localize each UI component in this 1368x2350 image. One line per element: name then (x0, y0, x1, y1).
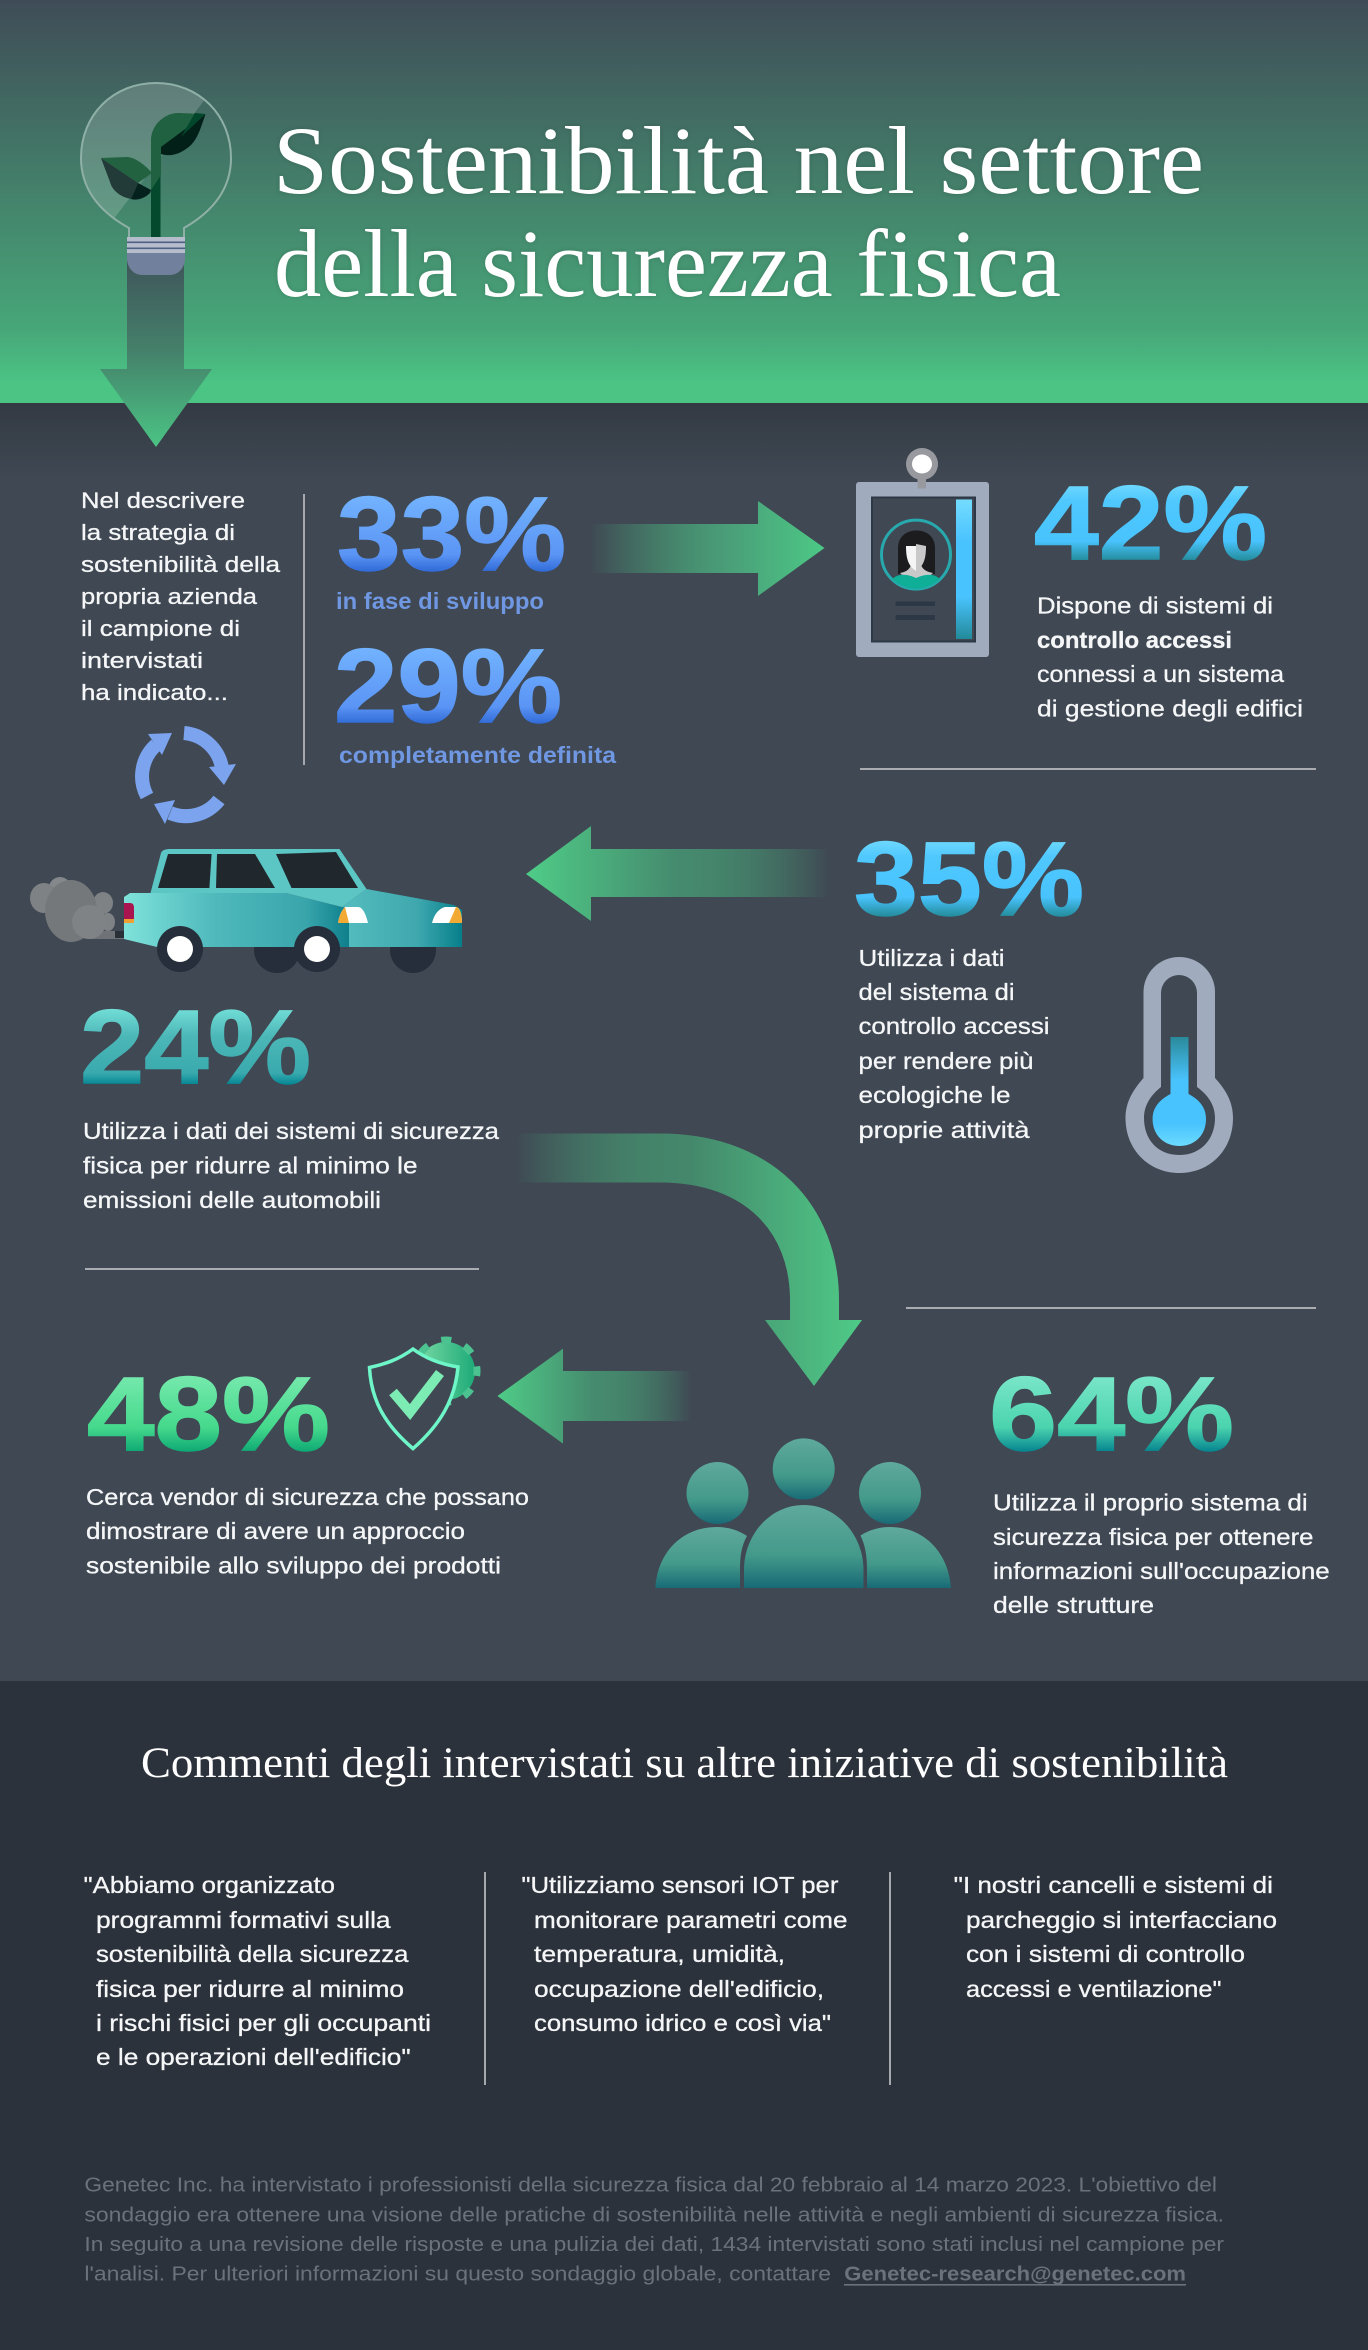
quote 1: i rischi fisici per gli occupanti (96, 2010, 431, 2036)
stat: 29% completamente definita: completamente definita (339, 742, 616, 768)
icon: light bulb with plant (80, 82, 232, 275)
methodology note: In seguito a una revisione delle risposte e una pulizia dei dati, 1434 intervistati sono stati inclusi nel campione per (84, 2234, 1224, 2256)
icon: car with exhaust smoke (30, 849, 462, 973)
quote 2 (521, 1872, 848, 2036)
stat: 42% access control (1034, 465, 1303, 722)
text block: strategy intro: la strategia di (81, 520, 235, 545)
stat: 48% vendors: 48% (87, 1356, 330, 1473)
methodology note: Genetec Inc. ha intervistato i professionisti della sicurezza fisica dal 20 febbraio al 14 marzo 2023. L'obiettivo del (84, 2175, 1217, 2197)
stat: 35% greener operations: del sistema di (858, 979, 1014, 1005)
quote 3: "I nostri cancelli e sistemi di (954, 1872, 1273, 1898)
text block: strategy intro: Nel descrivere (81, 488, 245, 513)
quote 1: fisica per ridurre al minimo (96, 1976, 404, 2002)
stat: 64% occupancy (989, 1356, 1330, 1618)
heading: comments: Commenti degli intervistati su altre iniziative di sostenibilità (141, 1740, 1228, 1787)
stat: 24% car emissions: 24% (80, 989, 311, 1106)
quote 3: accessi e ventilazione" (966, 1976, 1222, 2002)
text block: strategy intro: propria azienda (81, 584, 258, 609)
icon: ID badge (856, 448, 989, 657)
arrow: 33% to access card (590, 501, 824, 596)
text block: strategy intro: sostenibilità della (81, 552, 281, 577)
quote 1 (84, 1872, 431, 2070)
page background (0, 403, 1368, 1683)
stat: 24% car emissions: Utilizza i dati dei sistemi di sicurezza (83, 1118, 500, 1144)
methodology note (84, 2175, 1224, 2286)
stat: 24% car emissions: fisica per ridurre al minimo le (83, 1153, 418, 1179)
stat: 64% occupancy: 64% (989, 1356, 1234, 1473)
quote 3: parcheggio si interfacciano (966, 1907, 1277, 1933)
title (273, 107, 1204, 317)
stat: 33% in fase di sviluppo: in fase di sviluppo (336, 588, 544, 614)
arrow: curved down to people (515, 1158, 862, 1386)
stat: 24% car emissions (80, 989, 500, 1213)
text block: strategy intro (81, 488, 281, 705)
text block: strategy intro: intervistati (81, 648, 203, 673)
stat: 64% occupancy: delle strutture (993, 1592, 1154, 1618)
stat: 42% access control: controllo accessi (1037, 627, 1232, 653)
title: della sicurezza fisica (274, 210, 1061, 317)
arrow: 35% to car (526, 826, 830, 921)
stat: 35% greener operations: Utilizza i dati (858, 945, 1004, 971)
arrow: from bulb downward (100, 253, 212, 447)
arrow: to 48% (497, 1349, 692, 1444)
quote 1: programmi formativi sulla (96, 1907, 392, 1933)
stat: 42% access control: di gestione degli edifici (1037, 696, 1303, 722)
methodology note: sondaggio era ottenere una visione delle pratiche di sostenibilità nelle attività e negli ambienti di sicurezza fisica. (84, 2205, 1224, 2227)
stat: 29% completamente definita (334, 628, 616, 768)
quote 2: temperatura, umidità, (534, 1941, 785, 1967)
icon: people (656, 1438, 951, 1588)
stat: 35% greener operations: per rendere più (858, 1048, 1034, 1074)
stat: 33% in fase di sviluppo: 33% (337, 476, 566, 593)
quote 3 (954, 1872, 1277, 2002)
stat: 64% occupancy: Utilizza il proprio sistema di (993, 1490, 1308, 1516)
icon: thermometer (1126, 957, 1233, 1173)
title: Sostenibilità nel settore (273, 107, 1204, 214)
quote 2: occupazione dell'edificio, (534, 1976, 824, 2002)
quote 1: e le operazioni dell'edificio" (96, 2044, 411, 2070)
stat: 42% access control: Dispone di sistemi di (1037, 592, 1273, 618)
stat: 42% access control: 42% (1034, 465, 1267, 582)
stat: 64% occupancy: informazioni sull'occupazione (993, 1558, 1330, 1584)
stat: 35% greener operations (854, 821, 1084, 1143)
text block: strategy intro: il campione di (81, 616, 240, 641)
quote 2: consumo idrico e così via" (534, 2010, 831, 2036)
quote 2: monitorare parametri come (534, 1907, 848, 1933)
stat: 48% vendors: sostenibile allo sviluppo dei prodotti (86, 1553, 501, 1579)
stat: 48% vendors: Cerca vendor di sicurezza che possano (86, 1484, 529, 1510)
stat: 48% vendors: dimostrare di avere un approccio (86, 1518, 465, 1544)
panel: header banner (0, 0, 1368, 403)
stat: 35% greener operations: proprie attività (858, 1117, 1031, 1143)
text block: strategy intro: ha indicato... (81, 680, 228, 705)
stat: 24% car emissions: emissioni delle automobili (83, 1187, 381, 1213)
icon: cycle arrows (142, 733, 236, 824)
methodology note: l'analisi. Per ulteriori informazioni su questo sondaggio globale, contattare (84, 2264, 831, 2286)
icon: shield with gear (370, 1340, 477, 1449)
panel: comments footer (0, 1681, 1368, 2350)
stat: 35% greener operations: 35% (854, 821, 1084, 938)
quote 1: sostenibilità della sicurezza (96, 1941, 410, 1967)
stat: 64% occupancy: sicurezza fisica per ottenere (993, 1524, 1314, 1550)
stat: 29% completamente definita: 29% (334, 628, 562, 745)
quote 3: con i sistemi di controllo (966, 1941, 1245, 1967)
stat: 48% vendors (86, 1356, 529, 1579)
stat: 35% greener operations: controllo accessi (858, 1013, 1050, 1039)
stat: 42% access control: connessi a un sistema (1037, 661, 1285, 687)
quote 1: "Abbiamo organizzato (84, 1872, 335, 1898)
stat: 35% greener operations: ecologiche le (858, 1082, 1010, 1108)
quote 2: "Utilizziamo sensori IOT per (521, 1872, 839, 1898)
methodology note: Genetec-research@genetec.com (844, 2264, 1186, 2286)
